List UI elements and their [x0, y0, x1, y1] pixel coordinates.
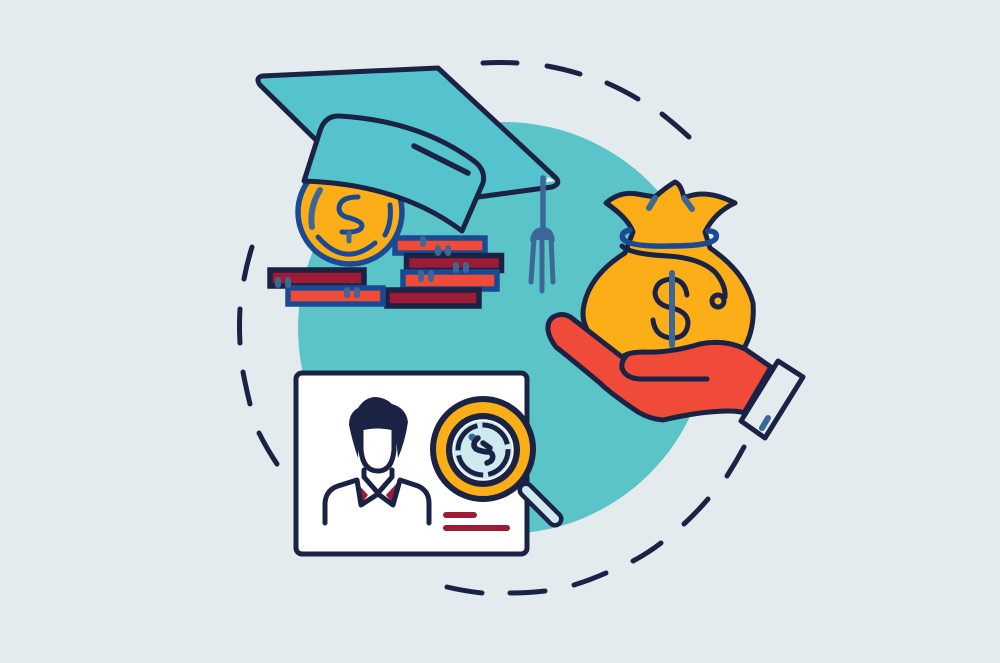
stacks of bills [270, 238, 502, 306]
person icon [325, 397, 429, 523]
coin [298, 160, 402, 264]
dashed circular ring [240, 62, 744, 593]
money bag [583, 182, 753, 365]
graduation cap [258, 68, 558, 291]
profile card [296, 373, 527, 554]
teal background circle [298, 122, 710, 534]
text lines [446, 515, 507, 528]
magnifying glass [433, 399, 555, 519]
hand [548, 314, 803, 438]
tassel [531, 178, 553, 291]
